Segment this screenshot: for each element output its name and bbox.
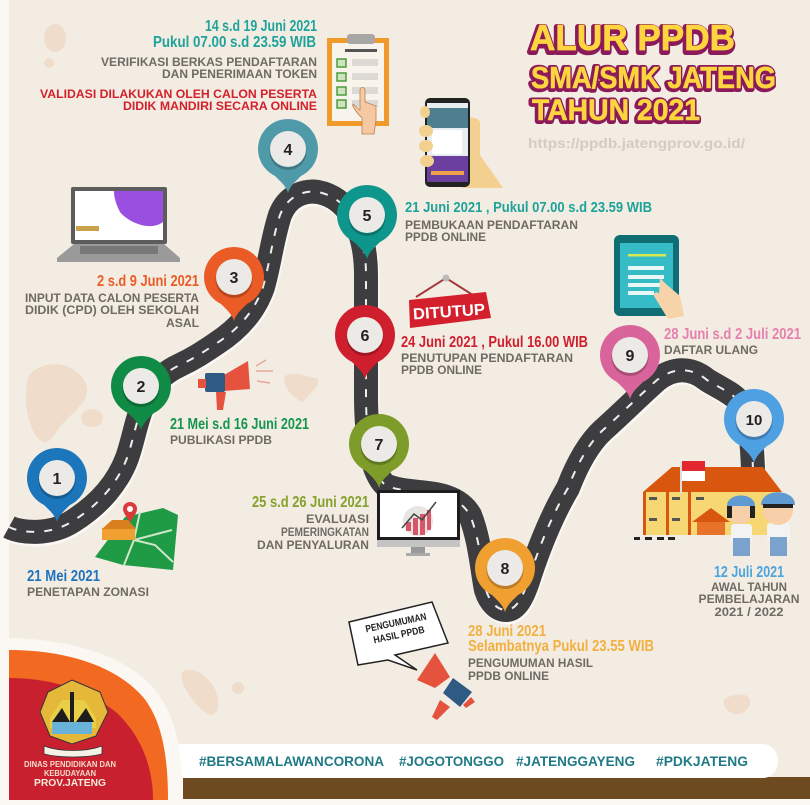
step 10 text: 2021 / 2022: [714, 605, 784, 619]
step 7 text: EVALUASI: [306, 512, 369, 526]
road: [9, 192, 754, 612]
background blobs: [26, 24, 750, 715]
step 6 text: 24 Juni 2021 , Pukul 16.00 WIB: [401, 334, 588, 351]
hashtag bar: #JATENGGAYENG: [516, 753, 635, 769]
pin 6: 6: [361, 328, 370, 345]
step 10 text: 12 Juli 2021: [714, 564, 784, 581]
step 8 text: [468, 623, 654, 683]
step 10 text: AWAL TAHUN: [711, 580, 787, 594]
title: TAHUN 2021: [532, 94, 700, 127]
step 7 text: PEMERINGKATAN: [281, 525, 369, 539]
step 1 text: PENETAPAN ZONASI: [27, 585, 149, 599]
step 5 text: 21 Juni 2021 , Pukul 07.00 s.d 23.59 WIB: [405, 199, 652, 216]
title: SMA/SMK JATENG: [531, 60, 776, 95]
step 4 text: VALIDASI DILAKUKAN OLEH CALON PESERTA: [40, 87, 317, 101]
step 4 text: DIDIK MANDIRI SECARA ONLINE: [123, 99, 317, 113]
step 4 text: VERIFIKASI BERKAS PENDAFTARAN: [101, 55, 317, 69]
step 5 text: PEMBUKAAN PENDAFTARAN: [405, 218, 578, 232]
monitor chart icon: [377, 490, 460, 556]
agency logo panel: PROV.JATENG: [34, 778, 106, 789]
step 3 text: ASAL: [166, 316, 199, 330]
pin 8: 8: [501, 561, 510, 578]
pin 2: [111, 356, 171, 430]
step 4 text: DAN PENERIMAAN TOKEN: [162, 67, 317, 81]
step 7 text: DAN PENYALURAN: [257, 538, 369, 552]
step 4 text: Pukul 07.00 s.d 23.59 WIB: [153, 34, 316, 51]
step 2 text: 21 Mei s.d 16 Juni 2021: [170, 416, 309, 433]
step 7 text: [252, 494, 369, 552]
agency logo panel: DINAS PENDIDIKAN DAN: [24, 760, 116, 769]
laptop icon: [57, 187, 180, 262]
step 5 text: [405, 199, 652, 244]
pin 5: [337, 185, 397, 259]
agency logo panel: [0, 638, 183, 805]
title: SMA/SMK JATENG: [530, 61, 775, 96]
pin 7: 7: [375, 437, 384, 454]
step 10 text: [698, 564, 800, 619]
step 1 text: [27, 568, 149, 599]
map zone icon: [95, 502, 178, 570]
title: TAHUN 2021: [531, 95, 699, 128]
school and students illustration: [634, 461, 795, 556]
student boy: [761, 492, 795, 556]
tablet icon: [614, 235, 684, 319]
step 6 text: PPDB ONLINE: [401, 363, 482, 377]
pin 5: 5: [363, 208, 372, 225]
step 8 text: 28 Juni 2021: [468, 623, 546, 640]
pin 10: 10: [746, 412, 762, 429]
pin 3: 3: [230, 270, 239, 287]
pin 8: [475, 538, 535, 612]
step 3 text: 2 s.d 9 Juni 2021: [97, 273, 199, 290]
hashtag bar: [175, 744, 810, 799]
step 1 text: 21 Mei 2021: [27, 568, 100, 585]
hashtag bar: #BERSAMALAWANCORONA: [199, 753, 384, 769]
pin 3: [204, 247, 264, 321]
step 8 announcement bubble: [349, 602, 475, 720]
step 10 text: PEMBELAJARAN: [698, 592, 800, 606]
closed sign: [409, 274, 491, 328]
step 9 text: [664, 326, 801, 357]
agency logo panel: KEBUDAYAAN: [44, 769, 96, 778]
step 3 text: INPUT DATA CALON PESERTA: [25, 291, 199, 305]
step 5 phone icon: [419, 98, 503, 188]
step 9 text: DAFTAR ULANG: [664, 343, 758, 357]
title: ALUR PPDB: [529, 19, 734, 60]
step 3 text: [25, 273, 199, 330]
hashtag bar: #JOGOTONGGO: [399, 753, 504, 769]
title: ALUR PPDB: [530, 17, 735, 58]
step 2 text: [170, 416, 309, 447]
step 6 text: [401, 334, 588, 377]
step 6 text: PENUTUPAN PENDAFTARAN: [401, 351, 573, 365]
hashtag bar: #PDKJATENG: [656, 753, 748, 769]
step 7 text: 25 s.d 26 Juni 2021: [252, 494, 369, 511]
step 8 text: PPDB ONLINE: [468, 669, 549, 683]
pin 1: [27, 448, 87, 522]
step 5 text: PPDB ONLINE: [405, 230, 486, 244]
pin 4: [258, 119, 318, 193]
website url: https://ppdb.jatengprov.go.id/: [528, 135, 745, 151]
step 8 announcement bubble: PENGUMUMAN: [365, 612, 428, 635]
logo emblem: [40, 680, 108, 757]
megaphone icon: [198, 360, 273, 410]
step 4 text: [40, 18, 317, 113]
icon: checklist clipboard: [327, 34, 389, 134]
pin 10: [724, 389, 784, 463]
pin 6: [335, 305, 395, 379]
pin 9: [600, 325, 660, 399]
pin 7: [349, 414, 409, 488]
student girl: [727, 496, 755, 556]
title: [529, 17, 776, 128]
step 8 text: Selambatnya Pukul 23.55 WIB: [468, 638, 654, 655]
pin 2: 2: [137, 379, 146, 396]
step 8 announcement bubble: HASIL PPDB: [373, 625, 426, 646]
step 3 text: DIDIK (CPD) OLEH SEKOLAH: [25, 303, 199, 317]
step 8 text: PENGUMUMAN HASIL: [468, 656, 593, 670]
step 2 text: PUBLIKASI PPDB: [170, 433, 272, 447]
step 4 text: 14 s.d 19 Juni 2021: [205, 18, 317, 35]
closed sign: DITUTUP: [413, 301, 486, 323]
pin 4: 4: [284, 142, 293, 159]
pin 9: 9: [626, 348, 635, 365]
pin 1: 1: [53, 471, 62, 488]
